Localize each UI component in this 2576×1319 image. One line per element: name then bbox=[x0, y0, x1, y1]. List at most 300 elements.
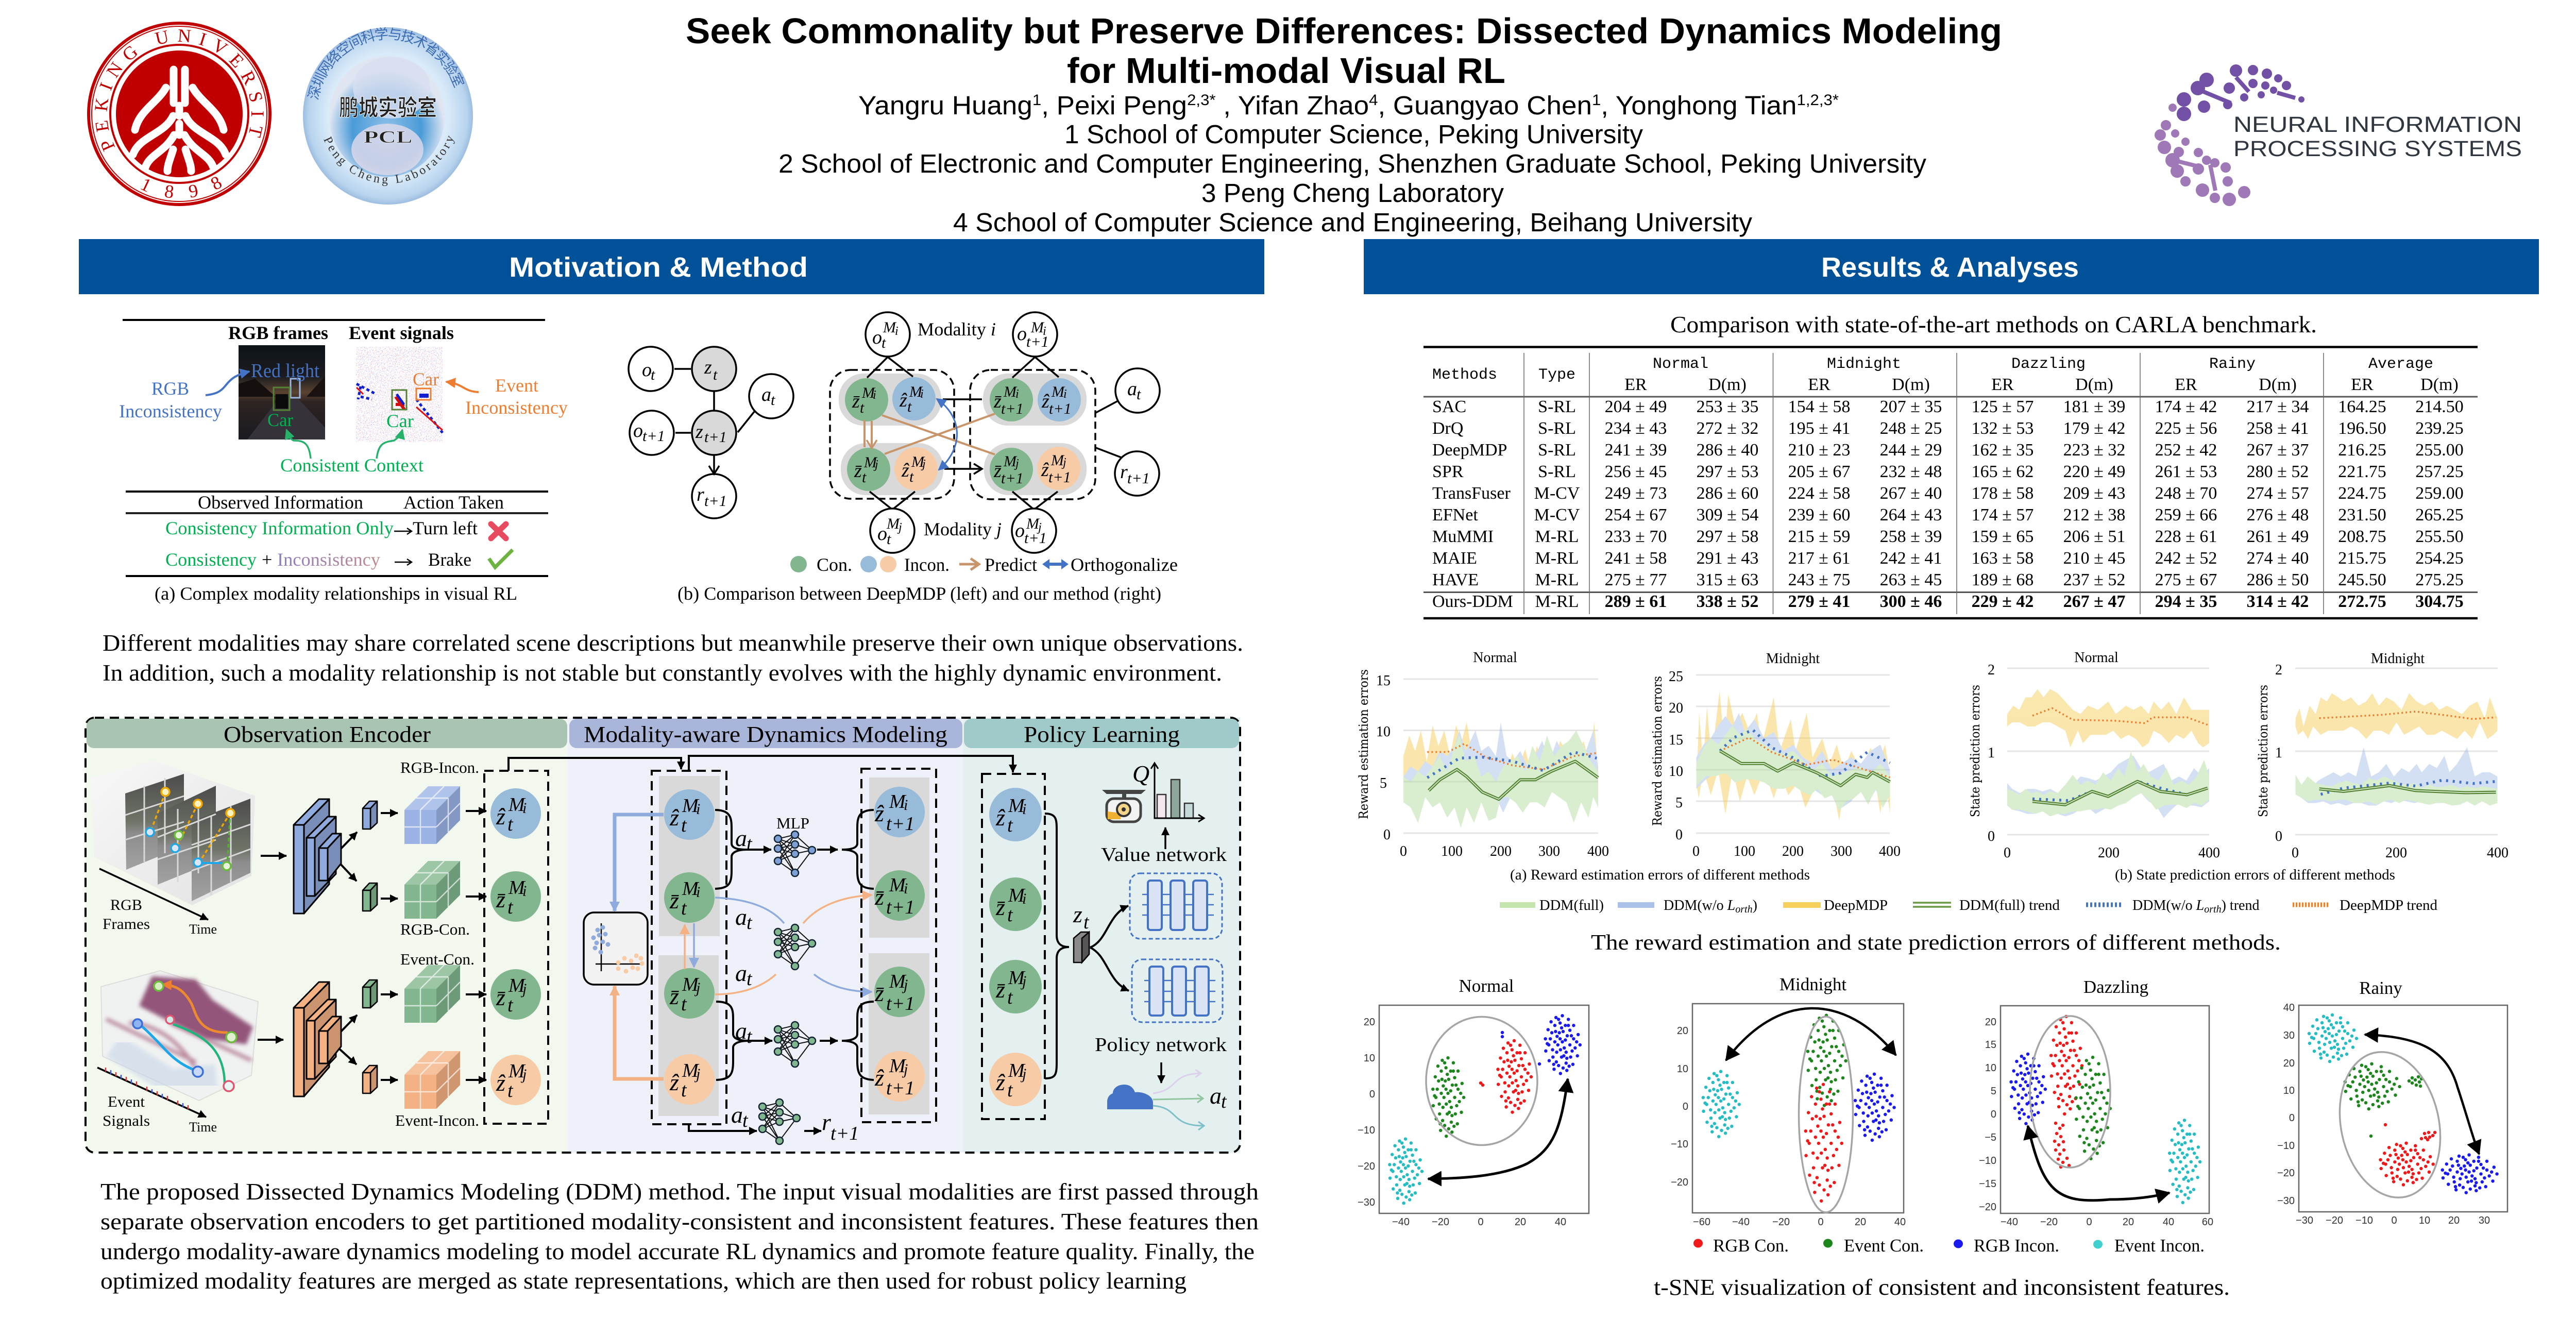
chart captions bbox=[1510, 867, 2395, 883]
DDM nodes: z̄ bbox=[852, 391, 860, 412]
encoder arrows bbox=[258, 811, 486, 1080]
chart: state prediction errors, Normal: Normal bbox=[2074, 650, 2119, 666]
observation node labels: M bbox=[1026, 515, 1040, 532]
dashed groups and gray pills bbox=[830, 370, 1095, 499]
row: SPR bbox=[1432, 462, 2464, 481]
table header: Methods bbox=[1432, 366, 1497, 384]
t-SNE plot: Normal bbox=[1358, 976, 1589, 1228]
panel: complex modality relationships figure bbox=[119, 320, 568, 604]
table sub-header: D(m) bbox=[2420, 375, 2459, 394]
observation nodes for modalities bbox=[866, 312, 1160, 553]
row: MAIE: MAIE bbox=[1432, 549, 1477, 568]
feature labels: RGB-Con. bbox=[400, 920, 470, 938]
DDM nodes: j bbox=[1061, 456, 1066, 469]
RGB encoder bbox=[294, 799, 341, 914]
row: SPR: 256 ± 45 bbox=[1605, 462, 1667, 481]
panel: complex modality relationships figure: Consistency bbox=[165, 549, 257, 570]
authors and affiliations: 3 Peng Cheng Laboratory bbox=[1201, 178, 1504, 208]
row: DrQ: 195 ± 41 bbox=[1788, 419, 1850, 438]
row: DeepMDP: 241 ± 39 bbox=[1605, 441, 1667, 460]
table header: Normal bbox=[1653, 356, 1708, 373]
encoder output latent nodes bbox=[484, 771, 548, 1124]
RGB inconsistency label and arrow bbox=[119, 371, 249, 421]
t-SNE plot: Rainy: 0 bbox=[2391, 1215, 2397, 1226]
observation node labels: o bbox=[1015, 520, 1025, 542]
DDM nodes: t bbox=[862, 469, 867, 486]
t-SNE plot: Dazzling: 20 bbox=[2123, 1216, 2134, 1228]
row: EFNet: 265.25 bbox=[2415, 505, 2464, 525]
row: SAC: SAC bbox=[1432, 397, 1466, 416]
t-SNE plot: Rainy: 10 bbox=[2283, 1085, 2295, 1096]
row: SPR: 261 ± 53 bbox=[2155, 462, 2217, 481]
chart: reward estimation errors, Normal: Normal bbox=[1473, 650, 1517, 666]
row: DeepMDP: 223 ± 32 bbox=[2063, 441, 2125, 460]
observation node labels: M bbox=[1030, 319, 1045, 336]
chart: reward estimation errors, Normal: 200 bbox=[1490, 843, 1512, 859]
authors and affiliations: , Yifan Zhao bbox=[1216, 91, 1369, 120]
DDM nodes: i bbox=[920, 387, 924, 401]
row: TransFuser: 267 ± 40 bbox=[1880, 484, 1942, 503]
row: SAC: 154 ± 58 bbox=[1788, 397, 1850, 416]
chart captions: (b) State prediction errors of different methods bbox=[2115, 867, 2395, 883]
row: TransFuser bbox=[1432, 484, 2464, 503]
t-SNE plot: Midnight: −20 bbox=[1772, 1216, 1790, 1228]
action and reward labels: t bbox=[747, 1026, 753, 1047]
t-SNE plot: Normal: −20 bbox=[1432, 1216, 1449, 1228]
dynamics: current latent column: M bbox=[682, 878, 700, 900]
chart: reward estimation errors, Midnight: 300 bbox=[1831, 843, 1852, 859]
table sub-header: ER bbox=[2351, 375, 2374, 394]
t-SNE plot: Dazzling: −15 bbox=[1979, 1178, 1996, 1190]
Event encoder bbox=[294, 982, 341, 1096]
icon: check bbox=[489, 550, 513, 567]
chart: reward estimation errors, Normal: 400 bbox=[1587, 843, 1609, 859]
encoder output latent nodes: t bbox=[507, 994, 514, 1016]
row: MAIE: 241 ± 58 bbox=[1605, 549, 1667, 568]
row: Ours-DDM: M-RL bbox=[1535, 592, 1579, 611]
row: EFNet: 259 ± 66 bbox=[2155, 505, 2217, 525]
row: HAVE: 237 ± 52 bbox=[2063, 570, 2125, 589]
row: HAVE bbox=[1432, 570, 2464, 589]
row: MuMMI: MuMMI bbox=[1432, 527, 1494, 546]
row: DeepMDP: 244 ± 29 bbox=[1880, 441, 1942, 460]
row: DeepMDP: 210 ± 23 bbox=[1788, 441, 1850, 460]
legend of error charts: DeepMDP trend bbox=[2340, 898, 2437, 914]
dynamics: current latent column: t bbox=[681, 815, 687, 836]
t-SNE plot: Rainy: −30 bbox=[2277, 1195, 2295, 1207]
chart: reward estimation errors, Normal: Reward estimation errors bbox=[1357, 669, 1371, 819]
dynamics: next latent column: i bbox=[904, 880, 908, 897]
DeepMDP node labels: a bbox=[761, 384, 771, 405]
row: Ours-DDM bbox=[1432, 592, 2464, 611]
table sub-header: ER bbox=[2175, 375, 2197, 394]
feature labels: RGB-Incon. bbox=[400, 758, 479, 776]
t-SNE plot: Dazzling: −5 bbox=[1985, 1132, 1996, 1143]
row: EFNet: 231.50 bbox=[2338, 505, 2386, 525]
t-SNE plot: Normal: 0 bbox=[1369, 1089, 1375, 1100]
connector to dynamics block bbox=[509, 758, 681, 771]
chart: reward estimation errors, Midnight: Midnight bbox=[1766, 651, 1820, 667]
DDM nodes: ẑ bbox=[902, 460, 909, 481]
observation node labels: t+1 bbox=[1026, 333, 1049, 350]
t-SNE plot: Rainy: −20 bbox=[2277, 1168, 2295, 1179]
t-SNE plot: Normal: −20 bbox=[1358, 1161, 1375, 1172]
observation node labels: M bbox=[883, 319, 897, 336]
legend of graphical model: Incon. bbox=[904, 554, 950, 575]
DeepMDP node labels: t bbox=[771, 392, 775, 409]
action and reward labels: a bbox=[735, 825, 747, 851]
text block: DDM method description: undergo modality-aware dynamics modeling to model accurate RL dynamics and promote feature quality. Finally, the bbox=[100, 1238, 1255, 1264]
t-SNE plot: Dazzling: Dazzling bbox=[2083, 977, 2148, 997]
legend of graphical model: Orthogonalize bbox=[1071, 554, 1178, 575]
policy: latent column: i bbox=[1022, 890, 1026, 907]
cross-modality prediction curves bbox=[715, 895, 872, 994]
row: DrQ: 239.25 bbox=[2415, 419, 2464, 438]
row: SPR: 257.25 bbox=[2415, 462, 2464, 481]
chart: reward estimation errors, Midnight: 15 bbox=[1669, 732, 1683, 748]
observation node labels: j bbox=[897, 521, 902, 534]
row: MuMMI: 159 ± 65 bbox=[1972, 527, 2033, 546]
table caption: Comparison with state-of-the-art methods on CARLA benchmark. bbox=[1670, 312, 2317, 337]
text block: DDM method description: separate observation encoders to get partitioned modality-consistent and inconsistent features. These features then bbox=[100, 1208, 1259, 1235]
table header: Midnight bbox=[1827, 356, 1901, 373]
chart: state prediction errors, Midnight bbox=[2256, 651, 2509, 861]
policy: latent column: M bbox=[1008, 1060, 1026, 1081]
DeepMDP node labels: o bbox=[633, 420, 643, 442]
row: EFNet: EFNet bbox=[1432, 505, 1478, 525]
dynamics: next latent column: ẑ bbox=[875, 1064, 884, 1091]
heading: Policy Learning bbox=[964, 719, 1239, 748]
table sub-header bbox=[1624, 375, 2459, 394]
DeepMDP node labels: r bbox=[697, 484, 704, 505]
dynamics MLP connectors bbox=[689, 810, 874, 1131]
t-SNE plot: Midnight: 20 bbox=[1677, 1025, 1688, 1037]
table sub-header: ER bbox=[1808, 375, 1831, 394]
row: EFNet: 174 ± 57 bbox=[1972, 505, 2033, 525]
logo: Peng Cheng Laboratory: 深圳网络空间科学与技术省实验室 bbox=[307, 27, 465, 100]
t-SNE plot: Midnight: −40 bbox=[1732, 1216, 1750, 1228]
legend of error charts: ) trend bbox=[2222, 898, 2259, 914]
t-SNE plot: Rainy: 40 bbox=[2283, 1002, 2295, 1013]
row: Ours-DDM: 304.75 bbox=[2415, 592, 2464, 611]
value and policy labels: Value network bbox=[1101, 844, 1227, 866]
dynamics: next latent column: t+1 bbox=[886, 1077, 914, 1099]
chart: reward estimation errors, Normal bbox=[1357, 650, 1609, 859]
encoder output latent nodes: j bbox=[520, 1066, 527, 1083]
row: SAC: 217 ± 34 bbox=[2247, 397, 2309, 416]
row: MuMMI: 297 ± 58 bbox=[1697, 527, 1758, 546]
policy: latent column bbox=[982, 774, 1045, 1119]
t-SNE plot: Midnight: 10 bbox=[1677, 1063, 1688, 1075]
DDM nodes: t+1 bbox=[1001, 470, 1024, 487]
row: Ours-DDM: 272.75 bbox=[2338, 592, 2386, 611]
observation node labels: t bbox=[1137, 386, 1141, 403]
row: MAIE: 163 ± 58 bbox=[1972, 549, 2033, 568]
feature labels: Event-Incon. bbox=[395, 1111, 479, 1129]
t-SNE plot: Dazzling: 15 bbox=[1985, 1039, 1996, 1051]
policy: latent column: i bbox=[1022, 801, 1026, 818]
observation node labels: r bbox=[1120, 461, 1128, 483]
dynamics: current latent column: j bbox=[694, 1066, 700, 1083]
row: EFNet: 276 ± 48 bbox=[2247, 505, 2309, 525]
dynamics: next latent column: M bbox=[889, 791, 907, 813]
observation node labels: o bbox=[1017, 323, 1027, 345]
event signal frame: Car bbox=[413, 369, 439, 390]
RGB frames illustration: Time bbox=[189, 922, 217, 937]
DDM nodes: ẑ bbox=[1041, 459, 1049, 481]
panel: DeepMDP vs DDM graphical models: Modality i bbox=[918, 319, 996, 340]
action and reward labels: t bbox=[747, 833, 753, 855]
observation node labels: M bbox=[886, 515, 901, 532]
RGB frames illustration: RGB bbox=[110, 897, 142, 914]
row: MuMMI: 228 ± 61 bbox=[2155, 527, 2217, 546]
policy: latent column: M bbox=[1008, 885, 1026, 906]
DDM nodes: i bbox=[1063, 387, 1067, 401]
logo: Peng Cheng Laboratory: PCL bbox=[364, 128, 412, 147]
legend of error charts bbox=[1500, 898, 2437, 915]
row: HAVE: 315 ± 63 bbox=[1697, 570, 1758, 589]
chart: reward estimation errors, Midnight: 5 bbox=[1675, 795, 1683, 811]
legend of t-SNE plots: Event Con. bbox=[1844, 1236, 1924, 1256]
row: MuMMI: M-RL bbox=[1535, 527, 1579, 546]
legend of error charts: DDM(w/o L bbox=[1664, 898, 1735, 914]
observation node labels: o bbox=[877, 523, 887, 545]
chart captions: (a) Reward estimation errors of different methods bbox=[1510, 867, 1810, 883]
t-SNE plot: Dazzling: 20 bbox=[1985, 1017, 1996, 1028]
policy: latent column: ẑ bbox=[996, 804, 1005, 831]
row: EFNet: 309 ± 54 bbox=[1697, 505, 1758, 525]
t-SNE plot: Normal: −10 bbox=[1358, 1125, 1375, 1136]
RGB night frame: Car bbox=[267, 410, 293, 430]
encoder output latent nodes: M bbox=[508, 877, 526, 899]
chart: state prediction errors, Normal: 0 bbox=[1988, 828, 1995, 844]
encoder output latent nodes: M bbox=[508, 794, 526, 816]
row: TransFuser: 178 ± 58 bbox=[1972, 484, 2033, 503]
DDM nodes: M bbox=[1003, 383, 1018, 400]
chart: reward estimation errors, Midnight: 20 bbox=[1669, 700, 1683, 716]
authors and affiliations: , Peixi Peng bbox=[1041, 91, 1187, 120]
row: DeepMDP bbox=[1432, 441, 2464, 460]
arrows in DDM graph bbox=[865, 357, 1124, 510]
DeepMDP node labels: t+1 bbox=[704, 429, 727, 446]
heading: Observation Encoder: Observation Encoder bbox=[224, 722, 431, 747]
legend of graphical model: Predict bbox=[985, 554, 1037, 575]
chart: reward estimation errors, Normal: 10 bbox=[1376, 724, 1391, 740]
authors and affiliations: 4 School of Computer Science and Engineering, Beihang University bbox=[953, 208, 1753, 237]
encoder output latent nodes: t bbox=[507, 1080, 514, 1102]
DDM nodes: M bbox=[861, 384, 876, 401]
chart: state prediction errors, Midnight: 200 bbox=[2385, 845, 2407, 861]
legend of error charts: DDM(full) bbox=[1539, 898, 1604, 914]
t-SNE plot: Rainy: 30 bbox=[2283, 1030, 2295, 1041]
RGB night frame bbox=[239, 345, 325, 439]
row: MAIE: 217 ± 61 bbox=[1788, 549, 1850, 568]
dynamics: next latent column: i bbox=[904, 797, 908, 814]
dynamics: current latent column: M bbox=[682, 795, 700, 817]
row: TransFuser: 224.75 bbox=[2338, 484, 2386, 503]
panel: complex modality relationships figure: Action Taken bbox=[403, 492, 504, 513]
heading: Modality-aware Dynamics Modeling: Modality-aware Dynamics Modeling bbox=[584, 722, 947, 747]
chart: state prediction errors, Midnight: 1 bbox=[2275, 745, 2282, 761]
section header: Results & Analyses: Results & Analyses bbox=[1821, 252, 2079, 283]
chart: state prediction errors, Normal: 2 bbox=[1988, 662, 1995, 678]
logo: Peng Cheng Laboratory: Peng Cheng Laboratory bbox=[324, 135, 455, 186]
row: DrQ: DrQ bbox=[1432, 419, 1463, 438]
policy: latent column: z̄ bbox=[996, 894, 1005, 920]
row: TransFuser: 259.00 bbox=[2415, 484, 2464, 503]
chart: reward estimation errors, Midnight: 400 bbox=[1879, 843, 1901, 859]
chart: state prediction errors, Normal: 1 bbox=[1988, 745, 1995, 761]
RGB frames illustration: Frames bbox=[103, 916, 150, 933]
row: HAVE: 243 ± 75 bbox=[1788, 570, 1850, 589]
icon: cross bbox=[491, 524, 506, 538]
table header: Rainy bbox=[2209, 356, 2256, 373]
observation node labels: i bbox=[1043, 325, 1046, 338]
row: DrQ: 196.50 bbox=[2338, 419, 2386, 438]
DDM nodes: j bbox=[1014, 457, 1019, 470]
dynamics: current latent column: t bbox=[681, 993, 687, 1015]
chart: reward estimation errors, Normal: 0 bbox=[1383, 827, 1391, 843]
row: MuMMI: 258 ± 39 bbox=[1880, 527, 1942, 546]
RGB night frame: Red light bbox=[251, 360, 319, 382]
row: Ours-DDM: 229 ± 42 bbox=[1972, 592, 2033, 611]
chart: reward estimation errors, Normal: 15 bbox=[1376, 673, 1391, 689]
t-SNE plot: Midnight: 0 bbox=[1818, 1216, 1824, 1228]
policy: latent column: ẑ bbox=[996, 1069, 1005, 1095]
observation node labels: j bbox=[1037, 521, 1042, 534]
dynamics: next latent column: z̄ bbox=[875, 980, 884, 1006]
policy: latent column: M bbox=[1008, 795, 1026, 817]
t-SNE plot: Dazzling: −40 bbox=[2001, 1216, 2018, 1228]
panel: complex modality relationships figure: Turn left bbox=[413, 518, 478, 538]
legend of graphical model bbox=[790, 554, 1178, 575]
t-SNE plot: Normal: 10 bbox=[1364, 1053, 1375, 1064]
encoder output latent nodes: t bbox=[507, 814, 514, 835]
connector to policy block bbox=[689, 756, 1013, 772]
row: HAVE: 189 ± 68 bbox=[1972, 570, 2033, 589]
t-SNE plot: Rainy: −30 bbox=[2296, 1215, 2313, 1226]
value and policy labels: Policy network bbox=[1095, 1034, 1227, 1056]
row: Ours-DDM: 338 ± 52 bbox=[1697, 592, 1758, 611]
panel: complex modality relationships figure: Inconsistency bbox=[277, 549, 380, 570]
legend of error charts: DeepMDP bbox=[1824, 898, 1888, 914]
t-SNE plot: Rainy: −20 bbox=[2326, 1215, 2343, 1226]
row: MuMMI: 261 ± 49 bbox=[2247, 527, 2309, 546]
legend of t-SNE plots bbox=[1693, 1236, 2205, 1256]
row: TransFuser: 274 ± 57 bbox=[2247, 484, 2309, 503]
row: DeepMDP: S-RL bbox=[1538, 441, 1576, 460]
graph: DeepMDP bbox=[629, 347, 793, 518]
row: HAVE: 275.25 bbox=[2415, 570, 2464, 589]
dynamics: next latent column: t+1 bbox=[886, 897, 914, 918]
row: DrQ: S-RL bbox=[1538, 419, 1576, 438]
DDM nodes: j bbox=[873, 458, 878, 471]
icon: value network bbox=[1130, 873, 1222, 939]
legend of t-SNE plots: RGB Con. bbox=[1713, 1236, 1789, 1256]
text block: DDM method description: The proposed Dissected Dynamics Modeling (DDM) method. The input visual modalities are first passed through bbox=[100, 1178, 1259, 1205]
authors and affiliations bbox=[778, 91, 1926, 237]
row: DrQ: 234 ± 43 bbox=[1605, 419, 1667, 438]
observation node labels: o bbox=[872, 327, 882, 348]
logo: NeurIPS bbox=[2156, 65, 2522, 205]
dynamics: current latent column: ẑ bbox=[670, 804, 679, 831]
panel: complex modality relationships figure: Event signals bbox=[349, 323, 454, 343]
row: SAC: 164.25 bbox=[2338, 397, 2386, 416]
row: SPR: 165 ± 62 bbox=[1972, 462, 2033, 481]
chart: state prediction errors, Normal: 400 bbox=[2198, 845, 2220, 861]
panel: DDM framework bbox=[86, 718, 1240, 1153]
t-SNE plot: Rainy: 20 bbox=[2283, 1058, 2295, 1069]
DDM nodes: M bbox=[1051, 383, 1065, 400]
panel: DeepMDP vs DDM graphical models bbox=[629, 312, 1178, 604]
authors and affiliations: 1 School of Computer Science, Peking University bbox=[1064, 120, 1643, 149]
row: DeepMDP: DeepMDP bbox=[1432, 441, 1507, 460]
RGB inconsistency label and arrow: RGB bbox=[151, 378, 189, 399]
t-SNE plot: Midnight: −10 bbox=[1671, 1139, 1688, 1150]
dynamics: next latent column: M bbox=[889, 1055, 907, 1077]
row: TransFuser: 249 ± 73 bbox=[1605, 484, 1667, 503]
t-SNE plot: Rainy: Rainy bbox=[2359, 978, 2402, 998]
dynamics: next latent column: j bbox=[902, 976, 908, 993]
icon: scale and Q bars bbox=[1102, 760, 1204, 849]
logo: Peking University bbox=[87, 22, 272, 206]
DDM nodes: t+1 bbox=[1049, 400, 1072, 417]
DeepMDP node labels: t bbox=[713, 366, 718, 383]
row: MAIE bbox=[1432, 549, 2464, 568]
authors and affiliations: Yangru Huang bbox=[858, 91, 1026, 120]
row: EFNet: 264 ± 43 bbox=[1880, 505, 1942, 525]
chart: reward estimation errors, Midnight: 200 bbox=[1782, 843, 1804, 859]
encoder output latent nodes: M bbox=[508, 975, 526, 996]
text block: motivation: In addition, such a modality relationship is not stable but constantly evolves with the highly dynamic environment. bbox=[103, 660, 1222, 686]
dynamics: next latent column bbox=[861, 769, 936, 1122]
DDM nodes: ẑ bbox=[1042, 391, 1049, 412]
panel: complex modality relationships figure: RGB frames bbox=[228, 323, 328, 343]
t-SNE plot: Midnight: 0 bbox=[1683, 1101, 1688, 1112]
panel: complex modality relationships figure: (a) Complex modality relationships in visual RL bbox=[155, 583, 517, 604]
legend of t-SNE plots: RGB Incon. bbox=[1974, 1236, 2059, 1256]
policy merge connector and z_t block: t bbox=[1083, 911, 1090, 933]
authors and affiliations: 1 bbox=[1032, 92, 1041, 109]
chart: reward estimation errors, Midnight: 0 bbox=[1692, 843, 1700, 859]
DeepMDP node labels: t+1 bbox=[704, 493, 727, 510]
chart: state prediction errors, Normal: 200 bbox=[2098, 845, 2120, 861]
row: HAVE: 245.50 bbox=[2338, 570, 2386, 589]
row: TransFuser: 248 ± 70 bbox=[2155, 484, 2217, 503]
row: TransFuser: 224 ± 58 bbox=[1788, 484, 1850, 503]
dynamics: current latent column bbox=[652, 771, 726, 1124]
action and reward labels: t bbox=[747, 912, 753, 934]
legend of error charts: DDM(full) trend bbox=[1959, 898, 2060, 914]
DDM nodes: t+1 bbox=[1048, 469, 1071, 486]
encoder output latent nodes: t bbox=[507, 897, 514, 918]
DDM nodes: M bbox=[1050, 452, 1065, 469]
feature labels: Event-Con. bbox=[400, 950, 474, 968]
policy: latent column: t bbox=[1007, 815, 1013, 836]
t-SNE plot: Rainy: 20 bbox=[2448, 1215, 2460, 1226]
t-SNE plot: Rainy: 0 bbox=[2289, 1112, 2295, 1124]
row: DrQ bbox=[1432, 419, 2464, 438]
Event signals illustration: Signals bbox=[103, 1112, 150, 1129]
feature labels bbox=[395, 758, 479, 1129]
t-SNE plot: Dazzling: 40 bbox=[2163, 1216, 2174, 1228]
table: comparison on CARLA bbox=[1423, 347, 2478, 618]
action and reward labels bbox=[731, 825, 859, 1144]
t-SNE plot: Dazzling: 0 bbox=[1991, 1109, 1996, 1120]
t-SNE plot: Midnight: −20 bbox=[1671, 1177, 1688, 1188]
row: SPR: 205 ± 67 bbox=[1788, 462, 1850, 481]
row: MuMMI: 208.75 bbox=[2338, 527, 2386, 546]
